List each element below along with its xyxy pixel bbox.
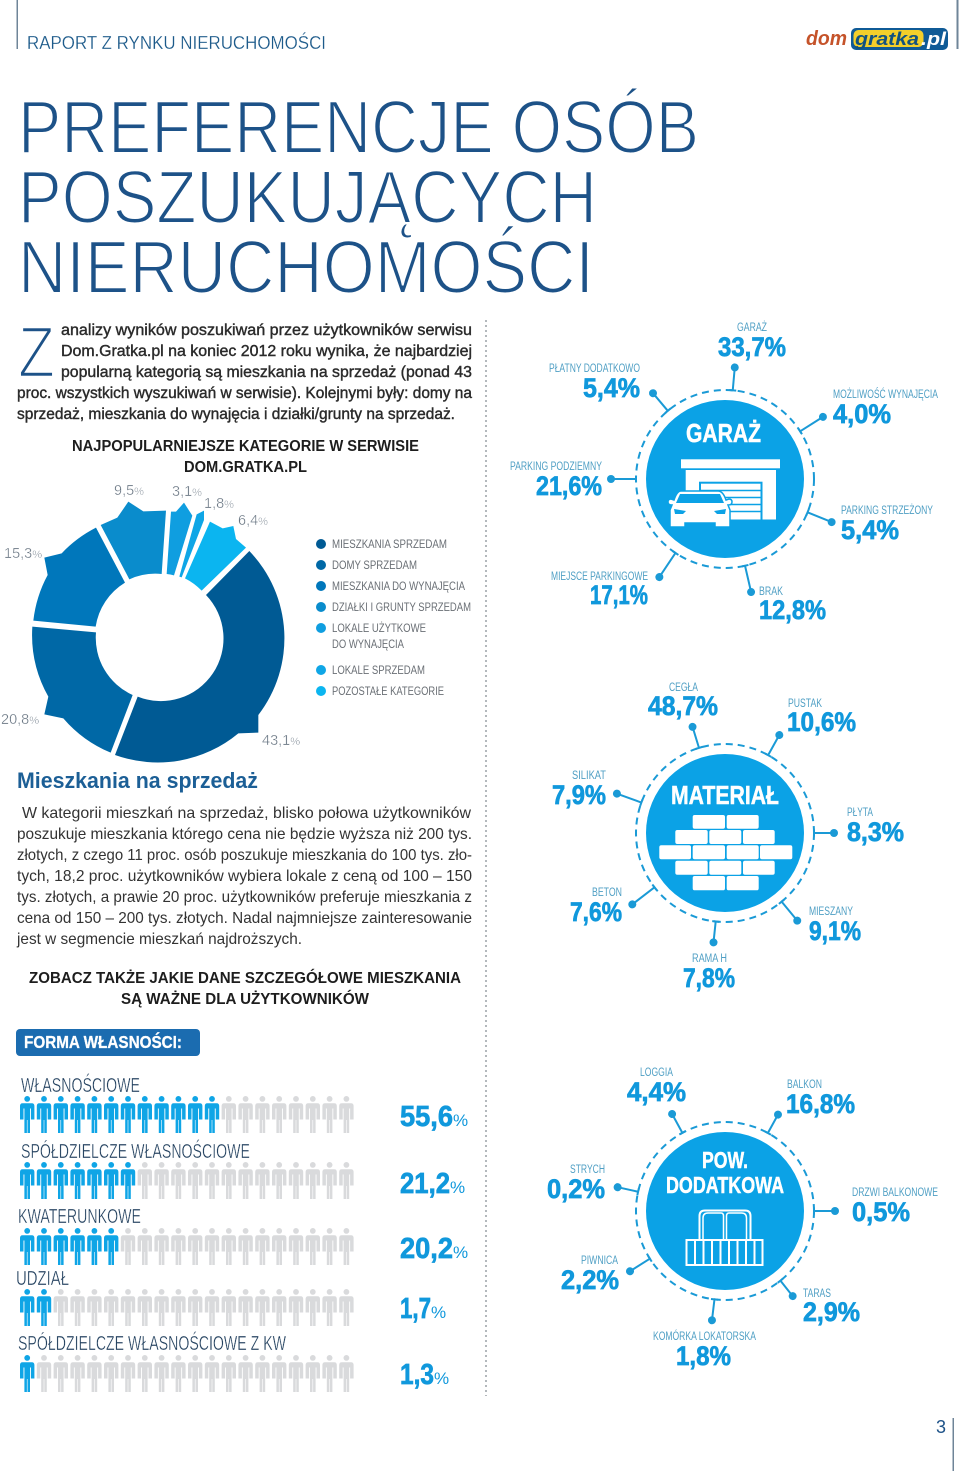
chart heading <box>72 438 419 476</box>
icon: garage with car <box>668 459 780 527</box>
dashed ring garaz <box>636 390 814 568</box>
segment: mieszkania do wynajecia <box>33 528 125 627</box>
stat: brak 12,8 <box>759 586 826 625</box>
segment: pozostale kategorie <box>185 522 246 591</box>
stat: rama h 7,8: 7,8% <box>683 963 735 993</box>
intro paragraph: sprzedaż, mieszkania do wynajęcia i działki/grunty na sprzedaż. <box>17 406 455 423</box>
row: kwaterunkowe <box>18 1206 468 1265</box>
disc heading garaz: GARAŻ <box>686 418 761 448</box>
row: spoldzielcze wlasnosciowe: 21,2% <box>400 1168 465 1200</box>
icon: brick wall <box>659 815 792 890</box>
logo: dom gratka.pl: .pl <box>921 29 947 49</box>
stat: rama h 7,8 <box>683 953 735 993</box>
blue disc powierzchnia <box>646 1132 804 1290</box>
stat: platny dodatkowo 5,4 <box>549 363 640 403</box>
row: wlasnosciowe <box>20 1073 468 1133</box>
legend: LOKALE SPRZEDAM <box>332 665 425 677</box>
legend: DZIAŁKI I GRUNTY SPRZEDAM <box>332 602 471 614</box>
stat: parking podziemny 21,6: 21,6% <box>536 471 602 501</box>
call to action heading: ZOBACZ TAKŻE JAKIE DANE SZCZEGÓŁOWE MIESZKANIA <box>29 968 461 987</box>
stat: pustak 10,6: 10,6% <box>787 707 856 737</box>
intro paragraph: popularną kategorią są mieszkania na sprzedaż (ponad 43 <box>61 364 472 381</box>
segment: domy sprzedam <box>32 627 133 753</box>
donut value labels: 9,5% <box>114 483 144 499</box>
legend: MIESZKANIA SPRZEDAM <box>332 539 447 551</box>
row: spoldzielcze wlasnosciowe z kw <box>18 1331 449 1392</box>
header rule left <box>16 0 18 49</box>
stat: silikat 7,9: 7,9% <box>552 780 606 810</box>
chart heading: NAJPOPULARNIEJSZE KATEGORIE W SERWISIE <box>72 438 419 455</box>
main title: NIERUCHOMOŚCI <box>18 225 594 309</box>
body paragraph: złotych, z czego 11 proc. osób poszukuje mieszkania do 100 tys. zło- <box>17 847 472 864</box>
donut value labels: 3,1% <box>172 484 202 500</box>
disc heading material: MATERIAŁ <box>671 780 779 810</box>
report title: RAPORT Z RYNKU NIERUCHOMOŚCI <box>27 32 326 53</box>
stat: miejsce parkingowe 17,1: MIEJSCE PARKINGOWE <box>551 571 648 583</box>
donut value labels: 20,8% <box>1 712 39 728</box>
stat: platny dodatkowo 5,4: 5,4% <box>583 373 640 403</box>
stat: miejsce parkingowe 17,1: 17,1% <box>590 580 648 610</box>
connectors garaz <box>607 363 837 597</box>
stat: rama h 7,8: RAMA H <box>692 953 727 965</box>
donut value labels: 15,3% <box>4 546 42 562</box>
stat: beton 7,6: BETON <box>592 887 622 899</box>
row: udzial <box>16 1268 446 1326</box>
stat: taras 2,9: 2,9% <box>803 1297 860 1327</box>
forma wlasnosci badge <box>16 1029 200 1056</box>
stat: brak 12,8: BRAK <box>759 586 783 598</box>
stat: komorka lokatorska 1,8: KOMÓRKA LOKATORSKA <box>653 1330 756 1343</box>
icon: balcony <box>686 1210 762 1265</box>
intro paragraph <box>17 313 472 423</box>
stat: parking podziemny 21,6 <box>510 461 602 501</box>
body paragraph: tys. złotych, a prawie 20 proc. użytkowników preferuje mieszkania z <box>17 889 472 906</box>
main title: POSZUKUJĄCYCH <box>18 155 597 239</box>
logo: dom gratka.pl: dom <box>806 28 847 50</box>
segment: dzialki i grunty <box>101 502 166 579</box>
diagram: material <box>612 722 838 947</box>
stat: komorka lokatorska 1,8: 1,8% <box>676 1341 731 1371</box>
disc heading powierzchnia: DODATKOWA <box>666 1172 784 1198</box>
segment: lokale uzytkowe do wynajecia <box>167 503 192 575</box>
stat: mieszany 9,1: MIESZANY <box>809 906 853 918</box>
donut value labels: 1,8% <box>204 496 234 512</box>
body paragraph: W kategorii mieszkań na sprzedaż, blisko połowa użytkowników <box>22 805 471 822</box>
disc heading powierzchnia: POW. <box>702 1147 748 1173</box>
blue disc garaz <box>646 400 804 558</box>
stat: platny dodatkowo 5,4: PŁATNY DODATKOWO <box>549 363 640 375</box>
section heading: Mieszkania na sprzedaż <box>17 768 258 793</box>
row: spoldzielcze wlasnosciowe z kw: SPÓŁDZIELCZE WŁASNOŚCIOWE Z KW <box>18 1331 286 1355</box>
logo: dom gratka.pl: gratka <box>854 29 919 49</box>
body paragraph <box>16 805 472 948</box>
stat: taras 2,9: TARAS <box>803 1288 831 1300</box>
row: wlasnosciowe: WŁASNOŚCIOWE <box>21 1073 140 1097</box>
stat: pustak 10,6: PUSTAK <box>788 698 822 710</box>
stat: balkon 16,8: BALKON <box>787 1079 822 1091</box>
stat: plyta 8,3: 8,3% <box>847 817 904 847</box>
legend: DO WYNAJĘCIA <box>332 639 404 651</box>
row: udzial: UDZIAŁ <box>16 1268 69 1290</box>
connectors powierzchnia <box>613 1109 839 1325</box>
segment: mieszkania sprzedam <box>115 551 284 762</box>
page number: 3 <box>936 1417 946 1437</box>
body paragraph: cena od 150 – 200 tys. złotych. Nadal najmniejsze zainteresowanie <box>17 910 472 927</box>
intro paragraph: Z <box>18 313 55 393</box>
stat: piwnica 2,2: 2,2% <box>561 1265 619 1295</box>
stat: cegla 48,7: CEGŁA <box>669 682 698 694</box>
dashed ring powierzchnia <box>636 1122 814 1300</box>
row: spoldzielcze wlasnosciowe z kw: 1,3% <box>400 1359 449 1391</box>
row: kwaterunkowe: KWATERUNKOWE <box>18 1206 141 1228</box>
donut value labels <box>1 483 300 749</box>
intro paragraph: proc. wszystkich wyszukiwań w serwisie). Kolejnymi były: domy na <box>17 385 472 402</box>
stat: mozliwosc wynajecia 4,0: 4,0% <box>833 399 891 429</box>
segment: lokale sprzedam <box>179 511 204 577</box>
stat: loggia 4,4: 4,4% <box>627 1077 686 1107</box>
legend: POZOSTAŁE KATEGORIE <box>332 686 444 698</box>
diagram: powierzchnia dodatkowa <box>613 1109 839 1325</box>
row: udzial: 1,7% <box>400 1293 446 1325</box>
stat: beton 7,6: 7,6% <box>570 897 622 927</box>
legend: LOKALE UŻYTKOWE <box>332 622 426 635</box>
stat: plyta 8,3: PŁYTA <box>847 807 873 819</box>
stat: beton 7,6 <box>570 887 622 927</box>
connectors material <box>612 722 838 947</box>
row: spoldzielcze wlasnosciowe <box>20 1139 465 1200</box>
donut chart <box>32 502 284 762</box>
body paragraph: jest w segmencie mieszkań najdroższych. <box>16 931 302 948</box>
stat: drzwi balkonowe 0,5 <box>852 1187 938 1227</box>
main title <box>18 85 699 309</box>
call to action heading <box>29 968 461 1008</box>
stat: loggia 4,4: LOGGIA <box>640 1067 673 1079</box>
stat: parking podziemny 21,6: PARKING PODZIEMNY <box>510 461 602 473</box>
row: kwaterunkowe: 20,2% <box>400 1233 468 1265</box>
row: wlasnosciowe: 55,6% <box>400 1101 468 1133</box>
diagram: garaz <box>607 363 837 597</box>
stat: brak 12,8: 12,8% <box>759 595 826 625</box>
logo: dom gratka.pl <box>806 28 948 50</box>
stat: komorka lokatorska 1,8 <box>653 1330 756 1371</box>
body paragraph: poszukuje mieszkania którego cena nie będzie wyższa niż 200 tys. <box>17 826 472 843</box>
stat: strych 0,2: 0,2% <box>547 1174 605 1204</box>
donut value labels: 43,1% <box>262 733 300 749</box>
stat: parking strzezony 5,4: 5,4% <box>841 515 899 545</box>
stat: parking strzezony 5,4 <box>841 504 933 545</box>
header rule right <box>956 0 958 49</box>
stat: mieszany 9,1: 9,1% <box>809 916 861 946</box>
stat: mieszany 9,1 <box>809 906 861 946</box>
main title: PREFERENCJE OSÓB <box>18 85 699 169</box>
stat: garaz 33,7: GARAŻ <box>737 321 767 334</box>
legend: MIESZKANIA DO WYNAJĘCIA <box>332 581 465 593</box>
stat: cegla 48,7: 48,7% <box>648 691 718 721</box>
intro paragraph: analizy wyników poszukiwań przez użytkowników serwisu <box>61 322 472 339</box>
stat: drzwi balkonowe 0,5: 0,5% <box>852 1197 910 1227</box>
intro paragraph: Dom.Gratka.pl na koniec 2012 roku wynika, że najbardziej <box>61 343 472 360</box>
call to action heading: SĄ WAŻNE DLA UŻYTKOWNIKÓW <box>121 989 370 1008</box>
stat: mozliwosc wynajecia 4,0 <box>833 388 938 429</box>
stat: silikat 7,9: SILIKAT <box>572 770 606 782</box>
dashed ring material <box>636 744 814 922</box>
footer rule <box>952 1418 954 1471</box>
disc heading powierzchnia <box>666 1147 784 1198</box>
stat: garaz 33,7: 33,7% <box>718 332 786 362</box>
chart heading: DOM.GRATKA.PL <box>184 459 307 476</box>
legend: DOMY SPRZEDAM <box>332 560 417 572</box>
stat: silikat 7,9 <box>552 770 606 810</box>
donut value labels: 6,4% <box>238 513 268 529</box>
stat: balkon 16,8 <box>786 1079 855 1119</box>
forma wlasnosci badge: FORMA WŁASNOŚCI: <box>24 1031 182 1052</box>
stat: balkon 16,8: 16,8% <box>786 1089 855 1119</box>
legend <box>316 539 471 698</box>
body paragraph: tych, 18,2 proc. użytkowników wybiera lokale z ceną od 100 – 150 <box>17 868 472 885</box>
blue disc material <box>646 754 804 912</box>
row: spoldzielcze wlasnosciowe: SPÓŁDZIELCZE WŁASNOŚCIOWE <box>21 1139 250 1163</box>
stat: miejsce parkingowe 17,1 <box>551 571 648 610</box>
stat: garaz 33,7 <box>718 321 786 362</box>
stat: strych 0,2: STRYCH <box>570 1164 605 1176</box>
stat: piwnica 2,2: PIWNICA <box>581 1255 618 1267</box>
